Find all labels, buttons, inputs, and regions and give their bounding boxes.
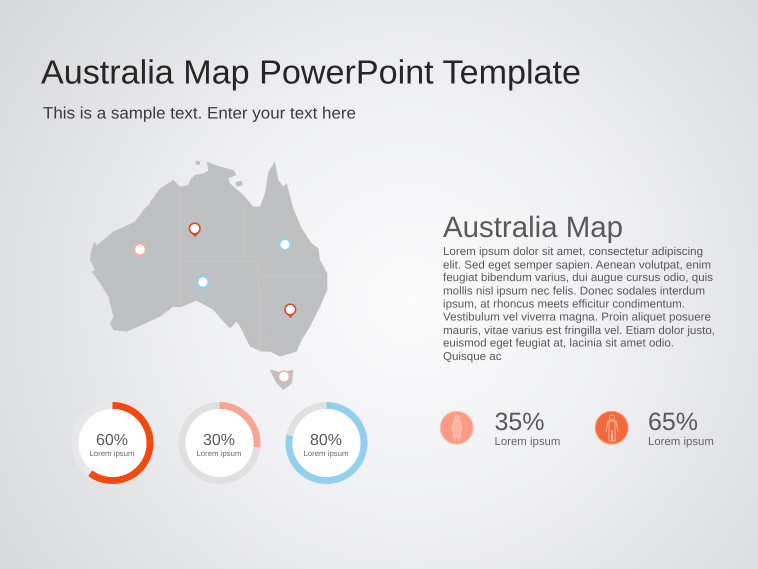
body text: Vestibulum vel viverra magna. Proin aliquet posuere	[443, 312, 711, 324]
body text: Lorem ipsum dolor sit amet, consectetur adipiscing	[443, 246, 703, 258]
pin: South Australia	[198, 276, 208, 288]
body text: Quisque ac	[443, 351, 502, 363]
mainland	[90, 161, 327, 357]
pin: Queensland	[280, 239, 290, 250]
donut: 60%: 60%	[96, 432, 128, 449]
heading: Australia Map: Australia Map	[443, 211, 623, 244]
pin: Western Australia	[134, 244, 146, 255]
donut: 30%: 30%	[203, 432, 235, 449]
donut: 60%: Lorem ipsum	[89, 449, 135, 458]
donut: 30%: Lorem ipsum	[196, 449, 242, 458]
body text: euismod eget feugiat at, lacinia sit amet odio.	[443, 338, 674, 350]
subtitle: This is a sample text. Enter your text here	[43, 104, 356, 122]
body text	[443, 246, 715, 363]
pin: Tasmania	[278, 371, 290, 382]
stat: 35%	[494, 408, 560, 448]
stat: 65%: Lorem ipsum	[648, 436, 714, 448]
body text: mollis nisl ipsum nec felis. Donec sodales interdum	[443, 285, 705, 297]
body text: elit. Sed eget semper sapien. Aenean volutpat, enim	[443, 259, 711, 271]
pin: Northern Territory	[189, 223, 200, 237]
stat: 65%: 65%	[648, 408, 698, 436]
icon: male figure	[595, 411, 628, 444]
Tasmania	[269, 369, 293, 390]
body text: ipsum, at rhoncus meets efficitur condimentum.	[443, 298, 685, 310]
icon: female figure	[440, 411, 473, 444]
stat: 65%	[648, 408, 714, 448]
donut: 80%: Lorem ipsum	[303, 449, 349, 458]
donut: 60%	[75, 406, 150, 480]
stat: 35%: Lorem ipsum	[494, 436, 560, 448]
stat: 35%: 35%	[494, 408, 545, 436]
pin: New South Wales	[285, 304, 296, 318]
donut: 80%: 80%	[310, 432, 342, 449]
map of Australia	[90, 161, 327, 390]
body text: mauris, vitae varius est fringilla vel. Etiam dolor justo,	[443, 325, 715, 337]
body text: feugiat bibendum varius, dui augue cursus odio, quis	[443, 272, 713, 284]
donut: 30%	[182, 406, 257, 480]
donut: 80%	[289, 406, 364, 480]
title: Australia Map PowerPoint Template	[41, 54, 581, 92]
